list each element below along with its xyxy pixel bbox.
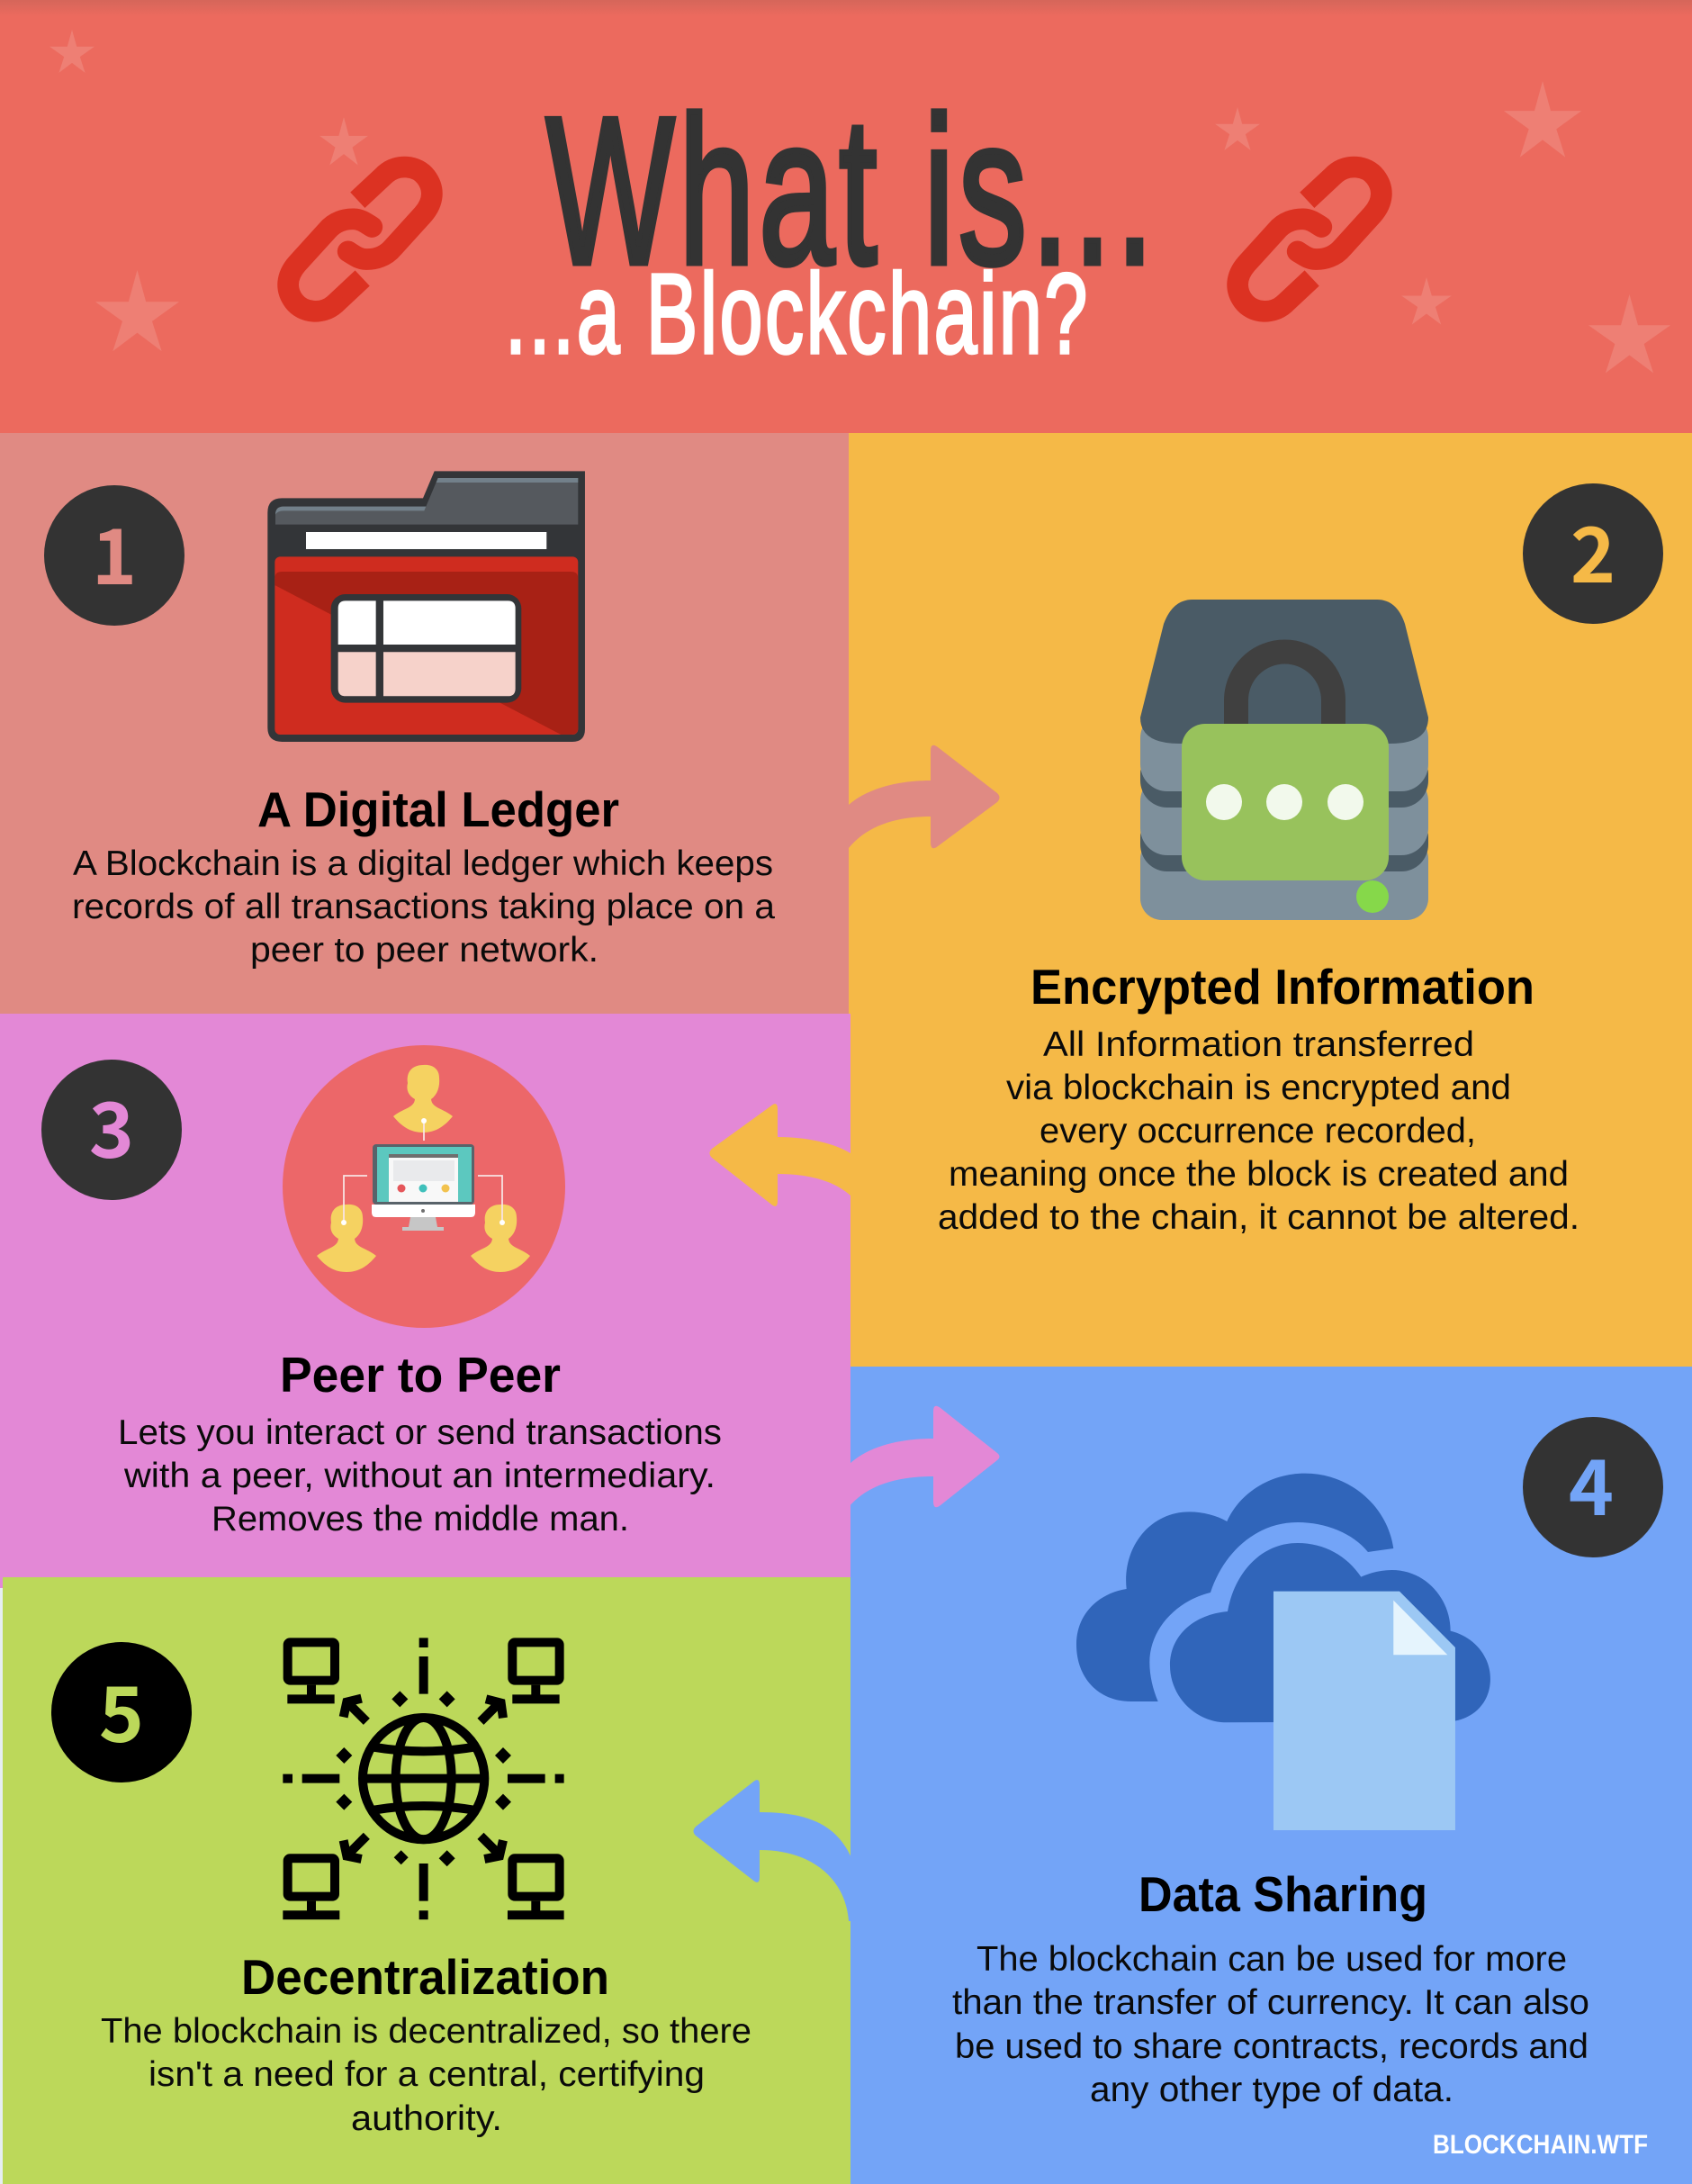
title: What is... xyxy=(546,75,1158,308)
body text: peer to peer network. xyxy=(250,931,598,970)
number badge 3: 3 xyxy=(89,1069,134,1180)
body text: isn't a need for a central, certifying xyxy=(148,2055,705,2094)
body text: A Blockchain is a digital ledger which keeps xyxy=(73,844,773,883)
icon: left chain link xyxy=(288,167,432,311)
number badge 1 xyxy=(44,485,184,626)
icon: server with padlock xyxy=(1140,600,1428,920)
body text: meaning once the block is created and xyxy=(949,1155,1569,1194)
decorative stars xyxy=(50,30,1670,373)
body text: via blockchain is encrypted and xyxy=(1006,1069,1511,1107)
icon: globe network xyxy=(283,1638,564,1919)
body text xyxy=(118,1413,722,1539)
heading: Peer to Peer xyxy=(280,1347,561,1403)
body text xyxy=(101,2012,752,2138)
icon: peer network xyxy=(283,1045,565,1328)
panel 3: peer to peer xyxy=(0,1014,850,1577)
icon: cloud with document xyxy=(1076,1474,1490,1830)
heading: Data Sharing xyxy=(1138,1866,1427,1922)
body text: Lets you interact or send transactions xyxy=(118,1413,722,1452)
heading: A Digital Ledger xyxy=(257,781,619,837)
arrow: step 1 to 2 xyxy=(849,745,999,848)
credit: BLOCKCHAIN.WTF xyxy=(1433,2130,1648,2160)
body text: added to the chain, it cannot be altered. xyxy=(938,1198,1580,1237)
body text: any other type of data. xyxy=(1090,2071,1454,2109)
body text: with a peer, without an intermediary. xyxy=(123,1457,716,1495)
body text: authority. xyxy=(351,2099,502,2138)
body text: The blockchain can be used for more xyxy=(976,1940,1567,1979)
panel 2: encrypted information xyxy=(849,433,1692,1367)
panel 4: data sharing xyxy=(850,1367,1692,2184)
panel 1: a digital ledger xyxy=(0,433,849,1015)
number badge 1: 1 xyxy=(92,496,137,607)
number badge 4: 4 xyxy=(1569,1427,1614,1538)
body text: The blockchain is decentralized, so there xyxy=(101,2012,752,2051)
icon: right chain link xyxy=(1238,167,1382,311)
body text: All Information transferred xyxy=(1043,1025,1474,1064)
body text xyxy=(938,1025,1580,1237)
body text: every occurrence recorded, xyxy=(1040,1112,1476,1151)
heading: Encrypted Information xyxy=(1030,959,1534,1015)
number badge 5: 5 xyxy=(99,1654,144,1764)
body text xyxy=(72,844,775,970)
number badge 4 xyxy=(1523,1417,1663,1557)
number badge 2: 2 xyxy=(1570,494,1616,605)
number badge 5 xyxy=(51,1642,192,1782)
subtitle: ...a Blockchain? xyxy=(505,250,1090,377)
body text: be used to share contracts, records and xyxy=(955,2027,1588,2066)
arrow: step 2 to 3 xyxy=(709,1104,850,1206)
heading: Decentralization xyxy=(241,1949,609,2005)
number badge 2 xyxy=(1523,483,1663,624)
body text xyxy=(952,1940,1589,2109)
panel 5: decentralization xyxy=(0,1577,850,2184)
arrow: step 3 to 4 xyxy=(849,1406,999,1507)
number badge 3 xyxy=(41,1060,182,1200)
panel: header banner xyxy=(0,0,1692,434)
body text: than the transfer of currency. It can also xyxy=(952,1983,1589,2022)
body text: records of all transactions taking place on a xyxy=(72,888,775,926)
arrow: step 4 to 5 xyxy=(693,1780,852,1921)
body text: Removes the middle man. xyxy=(212,1500,629,1539)
icon: ledger folder xyxy=(267,471,585,742)
